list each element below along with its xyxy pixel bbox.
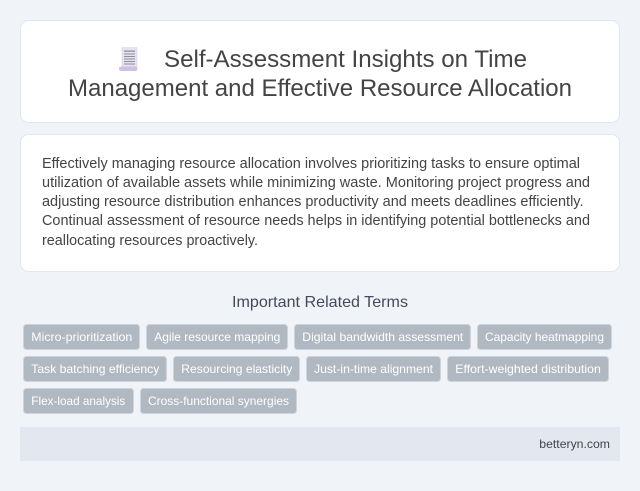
chip: Just-in-time alignment: Just-in-time alignment [314, 362, 434, 376]
panel: title card [20, 20, 620, 122]
chip: Effort-weighted distribution [448, 356, 608, 382]
chip: Agile resource mapping [146, 324, 288, 350]
chip: Agile resource mapping: Agile resource mapping [154, 330, 280, 344]
title text: Self-Assessment Insights on Time [164, 46, 527, 73]
chip: Cross-functional synergies [140, 388, 296, 414]
chip: Cross-functional synergies: Cross-functional synergies [148, 394, 289, 408]
chip: Resourcing elasticity: Resourcing elasticity [181, 362, 292, 376]
chip: Task batching efficiency: Task batching efficiency [31, 362, 159, 376]
chip: Micro-prioritization [24, 324, 140, 350]
heading: important related terms: Important Related Terms [232, 294, 408, 311]
chip: Flex-load analysis: Flex-load analysis [31, 394, 125, 408]
description text: adjusting resource distribution enhances productivity and meets deadlines efficiently. [42, 194, 584, 210]
description text [42, 156, 590, 249]
footer bar [20, 427, 620, 461]
description text: Continual assessment of resource needs helps in identifying potential bottlenecks and [42, 213, 590, 229]
chip: Just-in-time alignment [306, 356, 440, 382]
chip: Digital bandwidth assessment: Digital bandwidth assessment [302, 330, 464, 344]
chip: Flex-load analysis [24, 388, 134, 414]
chip: Capacity heatmapping: Capacity heatmapping [485, 330, 604, 344]
title text [68, 46, 572, 102]
title text: Management and Effective Resource Allocation [68, 75, 572, 102]
chip: Effort-weighted distribution: Effort-weighted distribution [455, 362, 601, 376]
chip: Digital bandwidth assessment [294, 324, 470, 350]
chip: Resourcing elasticity [174, 356, 300, 382]
panel: related term chips [24, 324, 612, 414]
description text: reallocating resources proactively. [42, 233, 258, 249]
chip: Task batching efficiency [24, 356, 166, 382]
panel: description card [20, 134, 620, 272]
chip: Micro-prioritization: Micro-prioritization [31, 330, 132, 344]
chip: Capacity heatmapping [478, 324, 612, 350]
description text: Effectively managing resource allocation involves prioritizing tasks to ensure optimal [42, 156, 580, 172]
icon: receipt document [119, 48, 137, 71]
description text: utilization of available assets while minimizing waste. Monitoring project progress and [42, 175, 590, 191]
footer brand text: betteryn.com [539, 437, 610, 451]
